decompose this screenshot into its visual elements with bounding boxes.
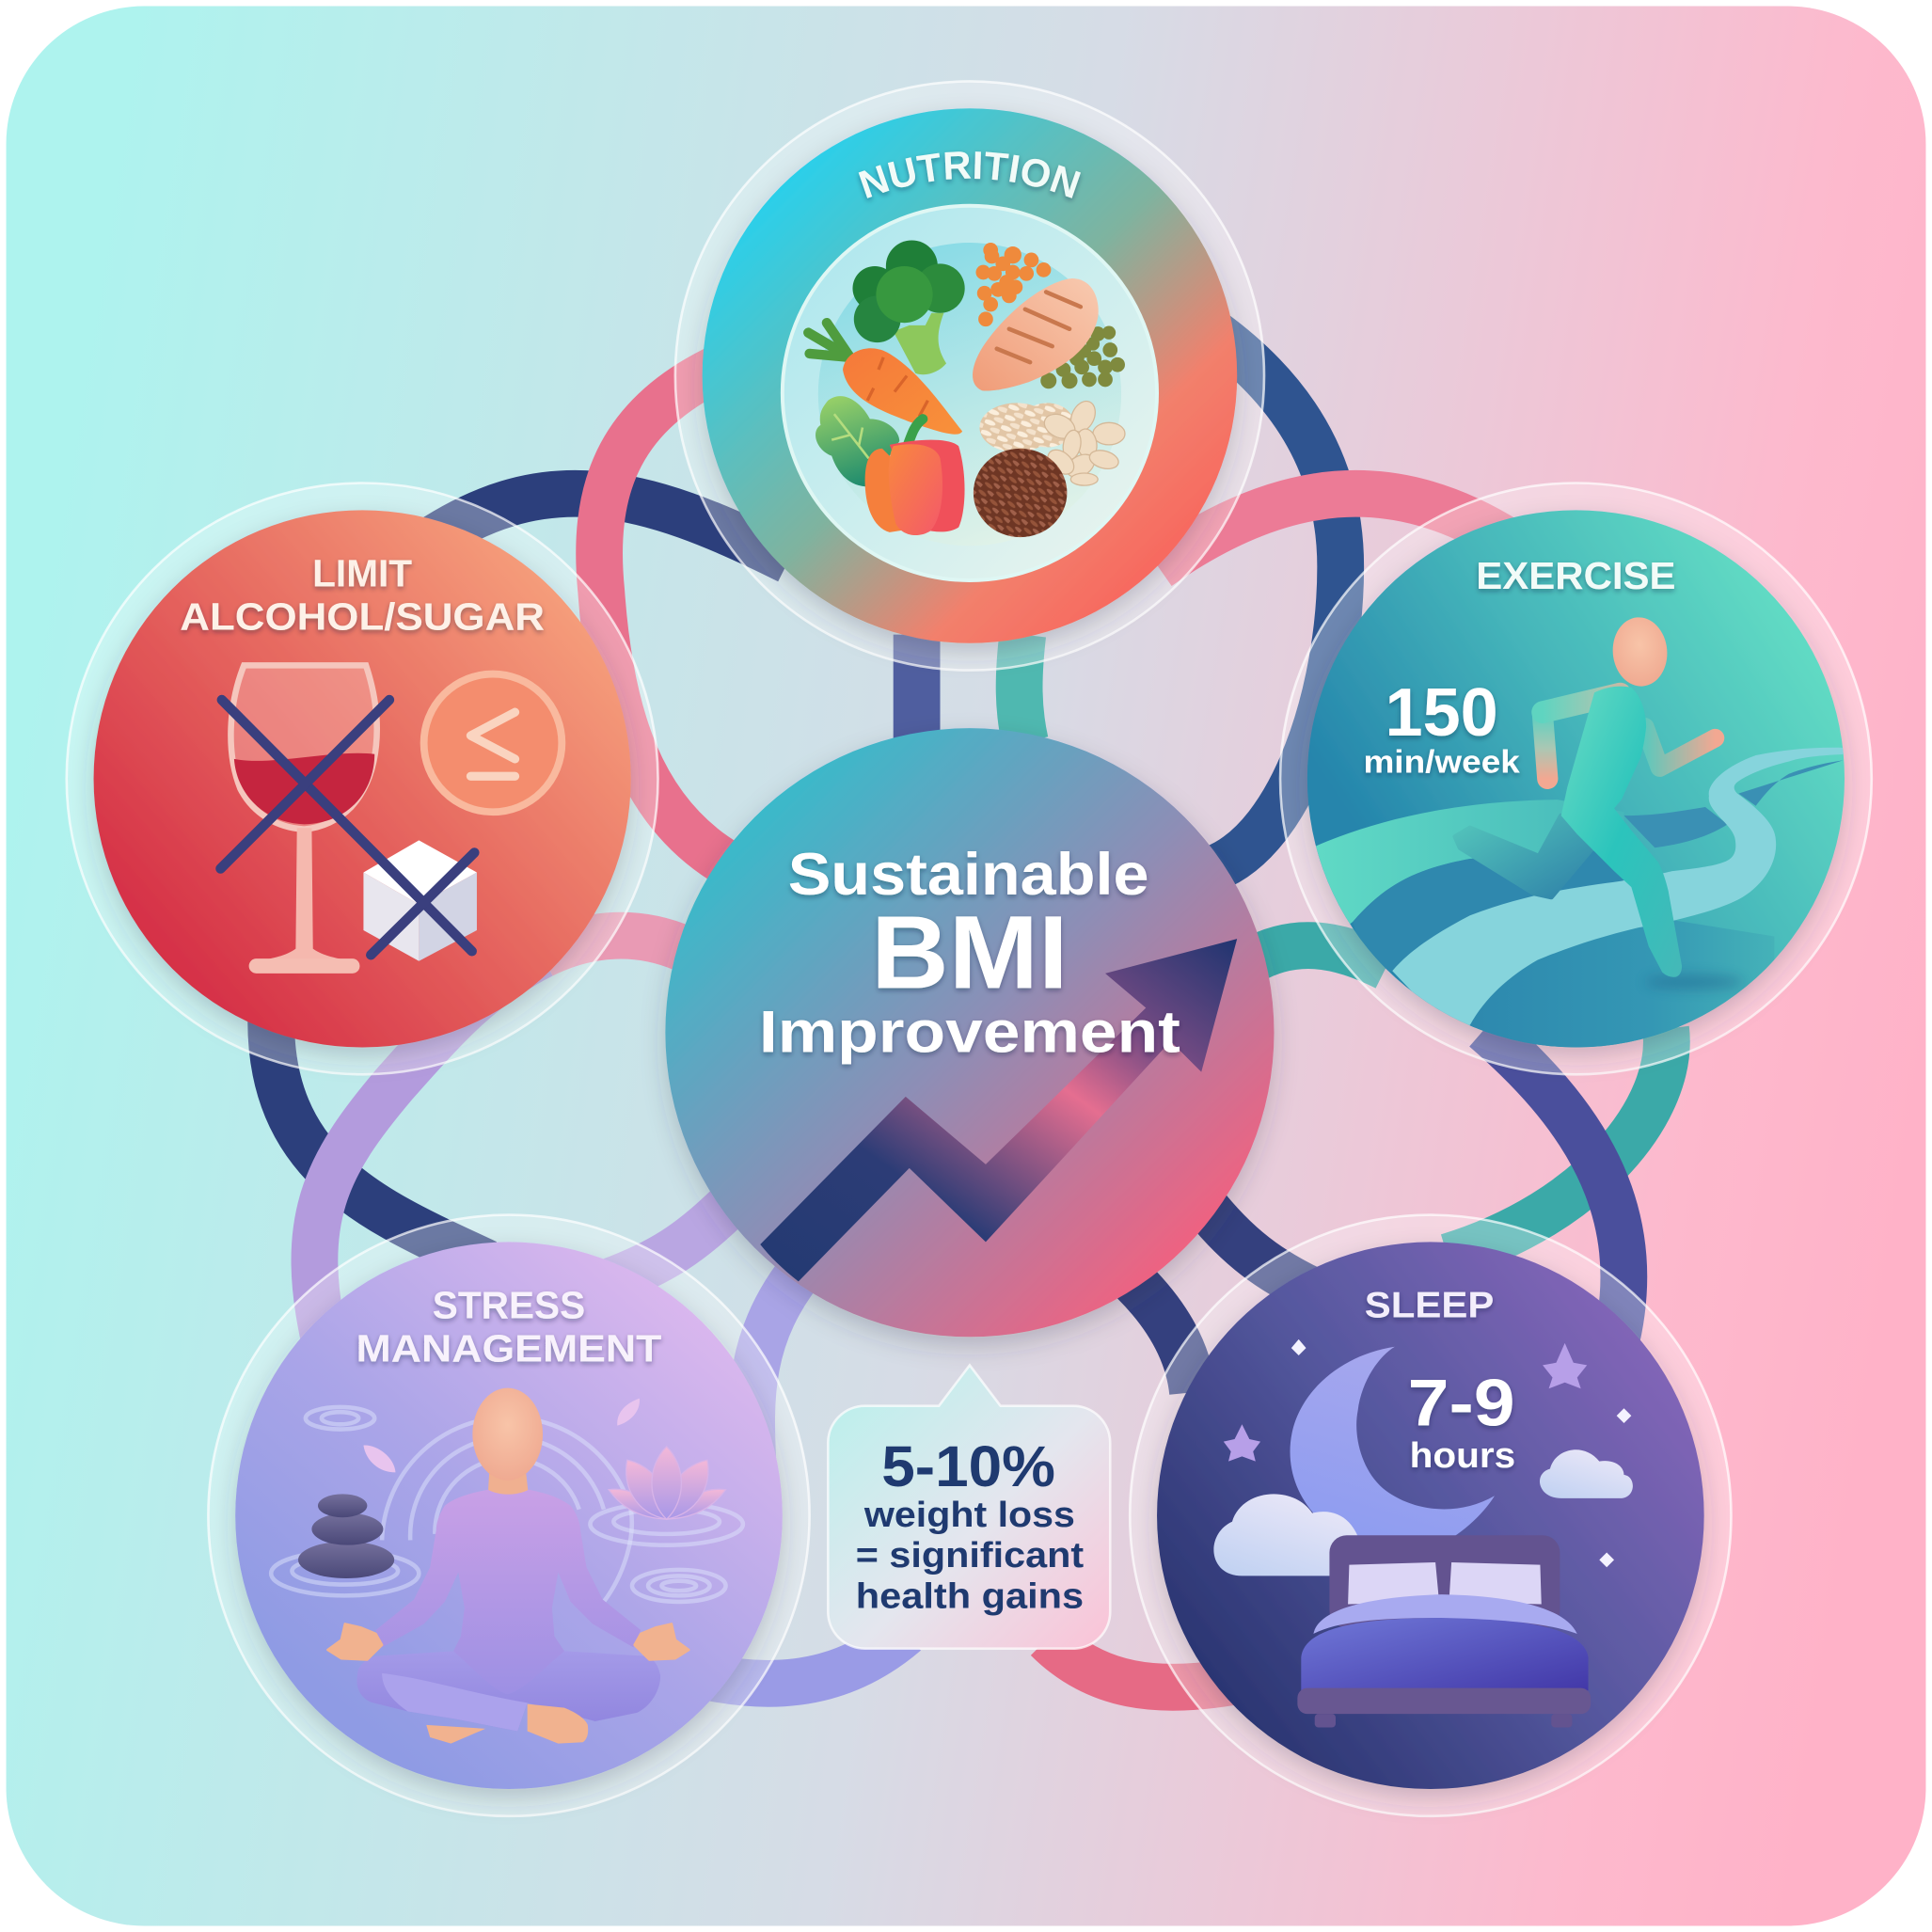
icon: lettuce [816,396,899,486]
connecting ribbons [271,333,1667,1687]
callout text: health gains [856,1576,1084,1616]
petals [363,1399,640,1472]
callout text: = significant [856,1536,1084,1576]
icon: stars [1224,1339,1631,1567]
heading: nutrition: NUTRITION [856,151,1083,202]
panel: nutrition [691,107,1248,664]
foot shadow [1645,974,1744,990]
heading: limit alcohol/sugar: LIMIT [312,552,412,595]
icon: pepper [865,419,965,535]
icon: broccoli [852,240,965,374]
label: 150 min/week: min/week [1363,744,1520,780]
panel: center circle [665,728,1274,1337]
icon: lotus [609,1447,726,1519]
icon: lentils and chicken [973,243,1125,391]
icon: cross marks [220,700,474,955]
icon: clouds [1213,1449,1633,1576]
road [1293,748,1848,1060]
heading: sleep: SLEEP [1365,1284,1494,1325]
icon: moon [1291,1347,1495,1555]
callout text: 5-10% [881,1434,1055,1499]
icon: carrot [808,323,962,435]
heading: exercise: EXERCISE [1476,554,1676,597]
icon: grains [974,397,1125,537]
panel: stress management [235,1242,783,1789]
icon: rising arrow [760,939,1237,1281]
callout: weight loss [828,1365,1110,1649]
title: sustainable BMI improvement: BMI [871,895,1069,1011]
plate [783,206,1157,580]
label: 7-9 hours: 7-9 [1408,1366,1515,1440]
panel: exercise [1293,510,1848,1060]
icon: meditating figure [327,1388,689,1744]
title: sustainable BMI improvement: Sustainable [788,842,1149,908]
title: sustainable BMI improvement: Improvement [759,1000,1180,1066]
icon: sugar cube [363,840,477,961]
panel: limit alcohol/sugar [94,510,631,1047]
ripple rings [271,1407,743,1602]
panel: sleep [1157,1242,1704,1789]
icon: bed [1297,1535,1591,1728]
label: 150 min/week: 150 [1386,675,1498,751]
icon: less-than-or-equal badge [424,674,562,812]
label: hours: hours [1410,1436,1515,1476]
callout text [856,1434,1084,1616]
heading: stress management: MANAGEMENT [356,1326,662,1370]
icon: runner [1455,615,1744,990]
icon: stones [298,1494,394,1578]
heading: stress management: STRESS [433,1284,585,1327]
heading: limit alcohol/sugar: ALCOHOL/SUGAR [180,594,545,638]
callout text: weight loss [863,1496,1075,1535]
title: sustainable BMI improvement [759,842,1180,1066]
icon: wine glass [230,665,377,974]
